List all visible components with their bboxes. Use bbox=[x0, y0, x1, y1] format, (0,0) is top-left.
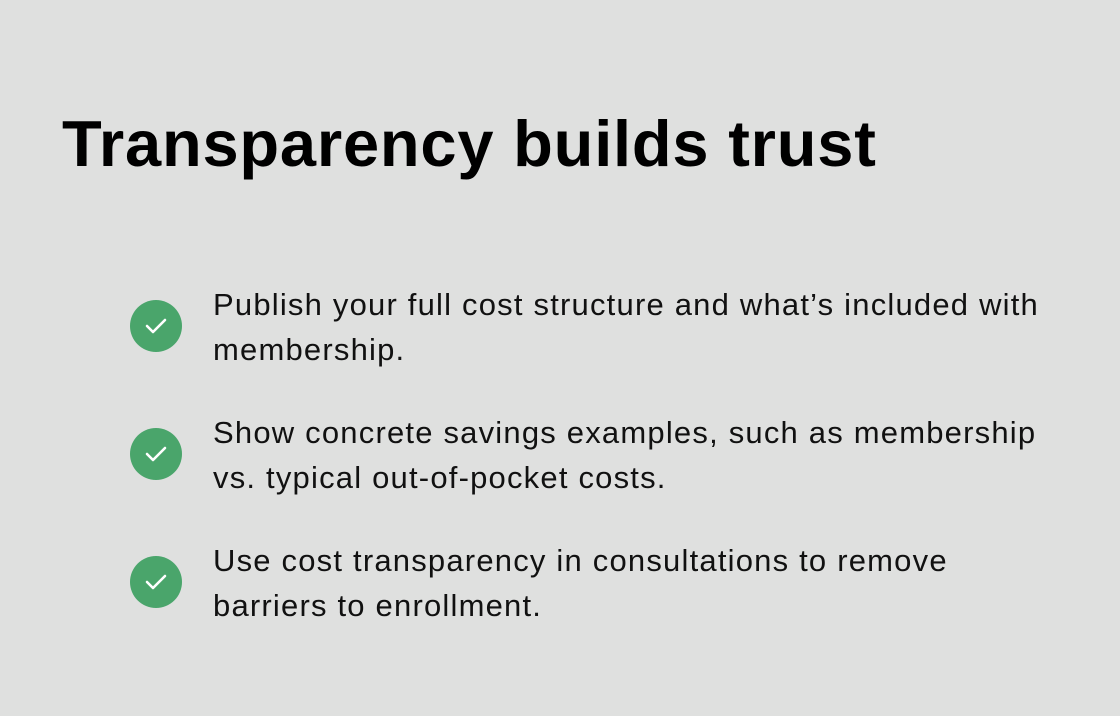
text 1: Publish your full cost structure and what’s included with bbox=[213, 287, 1039, 322]
text 3: Use cost transparency in consultations to remove bbox=[213, 543, 948, 578]
item 3 bbox=[130, 543, 948, 623]
title: Transparency builds trust bbox=[62, 107, 877, 180]
item 1 bbox=[130, 287, 1039, 367]
text 2: Show concrete savings examples, such as membership bbox=[213, 415, 1036, 450]
icon: check bbox=[130, 300, 182, 352]
icon: check bbox=[130, 428, 182, 480]
text 3: barriers to enrollment. bbox=[213, 588, 542, 623]
icon: check bbox=[130, 556, 182, 608]
item 2 bbox=[130, 415, 1036, 495]
text 3 bbox=[213, 543, 948, 623]
text 1 bbox=[213, 287, 1039, 367]
text 2 bbox=[213, 415, 1036, 495]
text 1: membership. bbox=[213, 332, 405, 367]
text 2: vs. typical out-of-pocket costs. bbox=[213, 460, 667, 495]
